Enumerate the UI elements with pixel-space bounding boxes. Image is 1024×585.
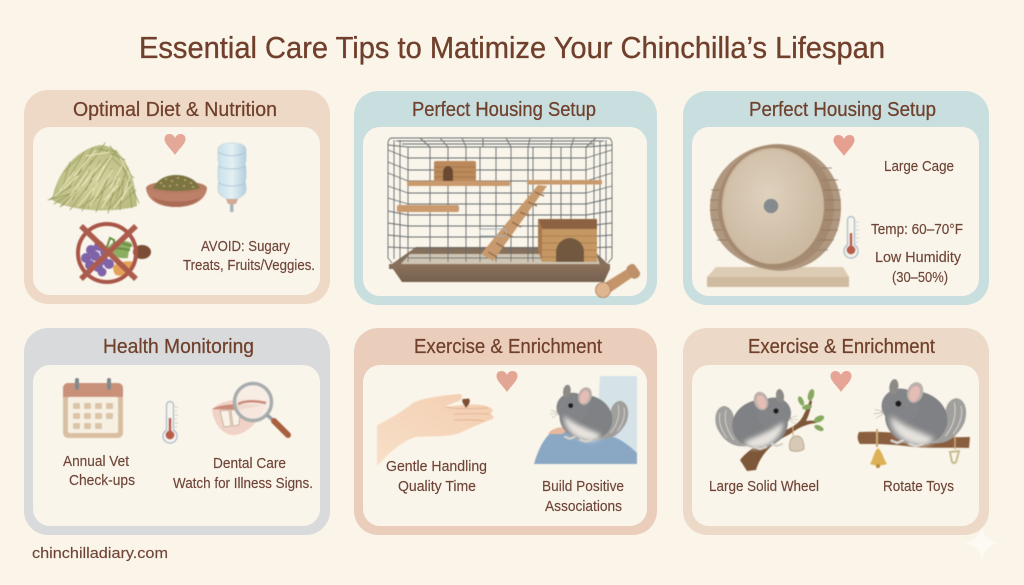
panel: exercise and enrichment handling	[354, 328, 657, 535]
panel: health monitoring	[24, 328, 330, 535]
icon: heart	[164, 134, 186, 155]
text: positive associations: Associations	[545, 499, 622, 515]
heading: optimal diet: Optimal Diet & Nutrition	[73, 99, 277, 121]
icon: wheel stand	[707, 144, 849, 287]
text: annual vet	[63, 454, 135, 489]
icon: heart	[830, 371, 852, 392]
icon: open hand with treat	[377, 394, 493, 466]
text: gentle handling: Quality Time	[398, 479, 476, 495]
icon: thermometer	[163, 402, 178, 443]
heading: health: Health Monitoring	[103, 336, 254, 358]
heading: housing: Perfect Housing Setup	[412, 99, 596, 121]
text: dental care	[173, 456, 313, 492]
icon: water dish	[480, 229, 506, 236]
text: conditions: Low Humidity	[875, 250, 962, 266]
panel: optimal diet and nutrition	[24, 90, 330, 304]
text: positive associations	[542, 479, 624, 515]
icon: cage wire grid	[388, 138, 612, 263]
text: conditions	[871, 159, 963, 286]
icon: dental check magnifier	[212, 384, 288, 435]
panel: exercise and enrichment toys	[683, 328, 989, 535]
icon: chinchilla on lap	[534, 376, 637, 464]
text: rotate toys: Rotate Toys	[883, 479, 954, 495]
panel: perfect housing setup cage	[354, 91, 657, 305]
icon: hay pile	[48, 143, 139, 213]
icon: thermometer	[844, 216, 859, 258]
heading: exercise handling: Exercise & Enrichment	[414, 336, 602, 358]
icon: shelves	[397, 180, 602, 212]
icon: chinchilla on twig with bell	[715, 388, 825, 471]
illustration: cage	[388, 138, 642, 298]
icon: sparkle	[964, 527, 999, 561]
text: large solid wheel: Large Solid Wheel	[709, 479, 819, 495]
text: avoid: Treats, Fruits/Veggies.	[183, 258, 315, 274]
heading: housing conditions: Perfect Housing Setup	[749, 99, 936, 121]
footer: website: chinchilladiary.com	[32, 545, 168, 562]
text: dental care: Watch for Illness Signs.	[173, 476, 313, 492]
text: conditions: (30–50%)	[892, 270, 948, 286]
icon: heart	[834, 135, 854, 156]
icon: heart	[496, 371, 518, 392]
icon: tray front	[389, 264, 610, 282]
text: dental care: Dental Care	[213, 456, 286, 472]
heading: exercise toys: Exercise & Enrichment	[748, 336, 935, 358]
icon: no sugary treats	[78, 224, 151, 282]
icon: chew toy	[596, 262, 642, 298]
text: gentle handling: Gentle Handling	[386, 459, 487, 475]
text: avoid: AVOID: Sugary	[201, 239, 291, 255]
text: gentle handling	[386, 459, 487, 495]
icon: chinchilla on branch with bell and ring	[858, 378, 970, 468]
icon: lower hut	[538, 219, 597, 262]
text: conditions: Temp: 60–70°F	[871, 222, 963, 238]
text: positive associations: Build Positive	[542, 479, 624, 495]
icon: water bottle	[218, 143, 246, 212]
icon: ladder	[481, 185, 547, 261]
text: annual vet: Check-ups	[69, 473, 135, 489]
panel: perfect housing setup conditions	[683, 91, 989, 305]
icon: calendar	[63, 378, 123, 438]
icon: tray floor	[389, 247, 610, 266]
text: conditions: Large Cage	[884, 159, 954, 175]
text: annual vet: Annual Vet	[63, 454, 129, 470]
title: Essential Care Tips to Matimize Your Chinchilla’s Lifespan	[139, 30, 885, 65]
text: avoid	[183, 239, 315, 274]
icon: pellet bowl	[146, 175, 207, 207]
icon: upper hut	[434, 161, 476, 182]
